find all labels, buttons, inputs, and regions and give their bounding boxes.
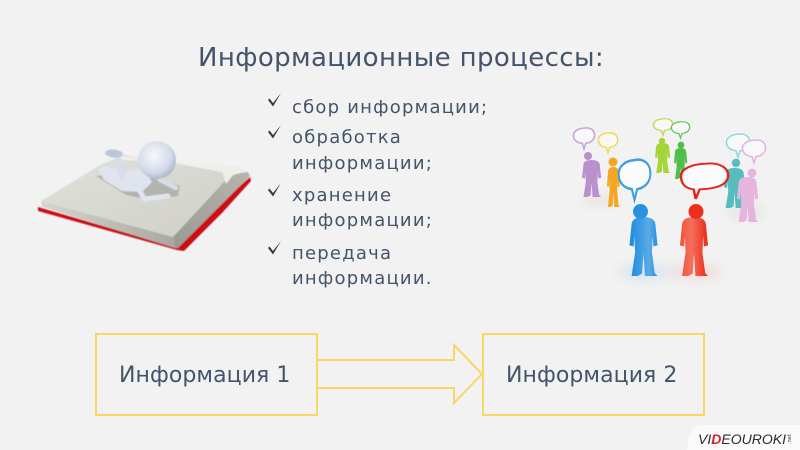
bullet 1: сбор информации; [292,97,488,118]
bubble: light green [653,119,673,135]
box: Информация 2 [483,334,704,415]
bullet 2 [268,125,433,174]
box: Информация 1 [96,334,317,415]
bullet 3: хранение [292,185,392,206]
figure legs and arms [118,159,176,199]
bubble: pink [742,140,766,163]
book top pages [41,155,226,237]
bubble: red [681,163,728,199]
person: orange [607,167,620,207]
person: teal [724,168,745,208]
illustration: figure lying on open book [38,141,251,251]
bullet 4: информации. [292,268,433,289]
book red cover [38,177,251,251]
person: purple [582,160,601,197]
person: red [680,217,708,276]
logo: Videouroki: VIDEOUROKI [698,431,786,447]
title: Информационные процессы: [198,43,604,73]
book page edge [41,201,175,248]
figure head [138,141,176,179]
bullet 2: информации; [292,153,433,174]
person: green [674,148,687,179]
bubble: purple [573,128,595,149]
bubble: teal [726,134,750,157]
logo: Videouroki: .net [787,434,793,444]
head: orange [608,158,618,166]
logo: Videouroki [687,425,800,450]
bullet 4: передача [292,243,392,264]
bullet 3 [268,183,433,231]
figure shadow [96,172,180,200]
head: green [678,142,684,148]
bullet 2: обработка [292,127,402,148]
illustration: people talking [573,119,766,281]
head: purple [584,152,592,160]
arrow [317,345,482,403]
figure raised foot [105,149,123,158]
bubble: yellow [598,133,618,153]
bubble: blue [619,160,650,200]
head: light green [659,138,665,144]
person: light green [655,143,670,173]
person: pink [737,177,758,222]
box: Информация 2: Информация 2 [506,363,678,388]
head: blue [633,204,648,219]
figure torso [98,167,152,192]
person: blue [630,217,658,276]
head: teal [732,159,740,167]
bubble: green [671,122,690,138]
head: pink [748,168,756,178]
bullet 3: информации; [292,210,433,231]
box: Информация 1: Информация 1 [119,363,290,388]
floor shadows [582,195,765,281]
bullet list [268,93,488,289]
book right curled page [120,156,248,184]
bullet 4 [268,241,433,289]
head: red [688,204,704,219]
